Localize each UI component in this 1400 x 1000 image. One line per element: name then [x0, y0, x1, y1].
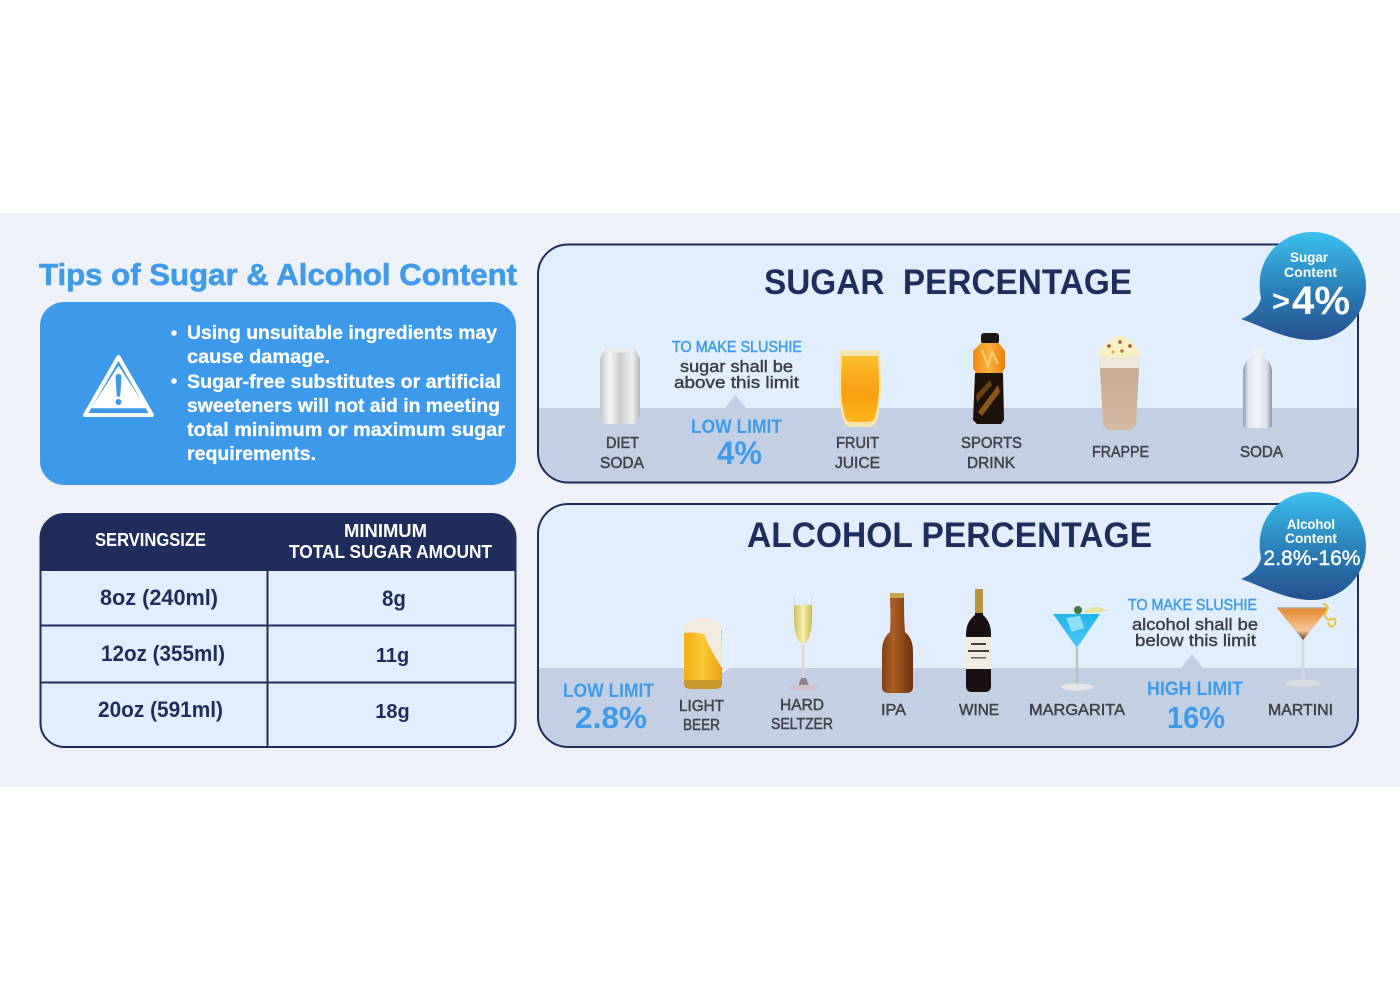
table rows: 12oz (355ml): [101, 641, 225, 666]
tips text: Using unsuitable ingredients may: [187, 323, 497, 344]
label: diet soda: SODA: [600, 455, 644, 472]
table rows: 8g: [382, 586, 406, 611]
callout: sugar content: [1241, 232, 1366, 340]
label: ipa: IPA: [881, 702, 906, 719]
label: diet soda: [600, 435, 644, 472]
table header: MINIMUM: [344, 521, 427, 541]
callout: sugar content: Content: [1284, 264, 1337, 280]
slushie note: alcohol: TO MAKE SLUSHIE: [1128, 597, 1257, 614]
callout: alcohol content: Content: [1285, 530, 1337, 546]
slushie note: sugar: sugar shall be: [680, 357, 793, 376]
slushie note: alcohol: [1128, 597, 1258, 650]
table header: [95, 521, 492, 562]
slushie note: sugar: [672, 339, 802, 392]
label: hard seltzer: [771, 697, 833, 733]
heading: ALCOHOL PERCENTAGE: [747, 516, 1152, 555]
slushie note: alcohol: alcohol shall be: [1132, 615, 1258, 634]
label: fruit juice: JUICE: [835, 455, 880, 472]
label: martini: MARTINI: [1268, 702, 1333, 719]
label: light beer: [679, 698, 724, 734]
icon: hard seltzer flute: [788, 595, 818, 690]
table rows: 11g: [376, 645, 409, 667]
panel: sugar percentage: [538, 232, 1366, 482]
tips text: sweeteners will not aid in meeting: [187, 396, 500, 417]
callout: sugar content: Sugar: [1290, 249, 1329, 265]
icon: soda bottle: [1243, 348, 1272, 428]
label: light beer: BEER: [683, 717, 720, 734]
tips text: [171, 323, 506, 465]
icon: light beer: [683, 618, 733, 689]
icon: diet soda can: [600, 348, 640, 424]
panel: alcohol percentage: [538, 492, 1366, 747]
table header: TOTAL SUGAR AMOUNT: [289, 542, 492, 562]
low limit 4%: LOW LIMIT: [691, 417, 782, 438]
callout: sugar content: >: [1272, 285, 1290, 318]
low limit 4%: 4%: [717, 435, 762, 471]
callout: alcohol content: Alcohol: [1287, 516, 1335, 532]
high limit 16%: HIGH LIMIT: [1147, 679, 1243, 700]
icon: warning triangle: [85, 357, 152, 415]
tips text: total minimum or maximum sugar: [187, 420, 506, 441]
background band: [0, 213, 1400, 787]
label: sports drink: [961, 435, 1022, 472]
table: serving size and sugar amount: [40, 514, 516, 747]
callout: alcohol content: [1241, 492, 1366, 600]
icon: fruit juice: [839, 350, 881, 427]
callout: sugar content: 4%: [1292, 279, 1350, 323]
tips text: requirements.: [187, 444, 316, 465]
label: fruit juice: [835, 435, 880, 472]
low limit 2.8%: 2.8%: [575, 700, 647, 735]
icon: frappe: [1098, 336, 1141, 430]
callout: alcohol content: 2.8%-16%: [1264, 547, 1360, 570]
icon: martini: [1277, 604, 1335, 686]
label: soda: SODA: [1240, 444, 1283, 461]
high limit 16%: [1147, 679, 1243, 735]
label: fruit juice: FRUIT: [836, 435, 879, 452]
label: frappe: FRAPPE: [1092, 444, 1149, 461]
low limit 4%: [691, 417, 782, 471]
label: hard seltzer: SELTZER: [771, 716, 833, 733]
label: light beer: LIGHT: [679, 698, 724, 715]
label: sports drink: SPORTS: [961, 435, 1022, 452]
table rows: 8oz (240ml): [100, 585, 218, 610]
low limit 2.8%: LOW LIMIT: [563, 681, 654, 702]
table header: SERVINGSIZE: [95, 530, 206, 550]
label: wine: WINE: [959, 702, 999, 719]
tips text: cause damage.: [187, 347, 330, 368]
table rows: 20oz (591ml): [98, 697, 223, 722]
label: sports drink: DRINK: [967, 455, 1015, 472]
panel: tips: [40, 302, 516, 485]
label: diet soda: DIET: [606, 435, 639, 452]
icon: margarita: [1053, 606, 1107, 690]
slushie note: sugar: above this limit: [674, 373, 799, 392]
high limit 16%: 16%: [1167, 700, 1225, 735]
heading: SUGAR PERCENTAGE: [764, 263, 1132, 302]
title: Tips of Sugar & Alcohol Content: [39, 257, 517, 292]
table rows: 18g: [375, 701, 410, 723]
label: margarita: MARGARITA: [1029, 702, 1125, 719]
low limit 2.8%: [563, 681, 654, 735]
table rows: [98, 585, 410, 723]
icon: wine bottle: [966, 589, 991, 692]
label: hard seltzer: HARD: [780, 697, 824, 714]
slushie note: alcohol: below this limit: [1135, 631, 1256, 650]
icon: sports drink: [973, 333, 1005, 424]
slushie note: sugar: TO MAKE SLUSHIE: [672, 339, 802, 356]
icon: ipa bottle: [882, 593, 913, 693]
tips text: Sugar-free substitutes or artificial: [187, 372, 501, 393]
